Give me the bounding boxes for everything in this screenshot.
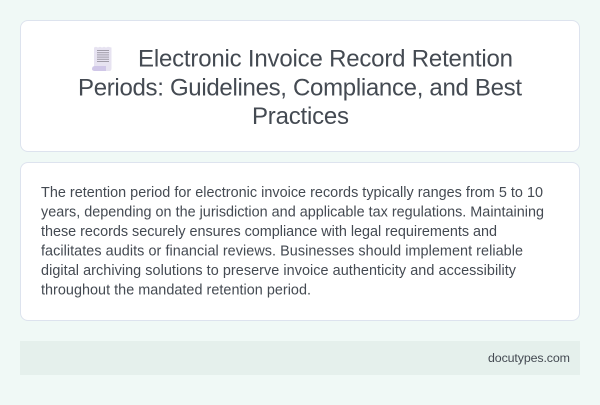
footer source text: docutypes.com xyxy=(488,351,570,365)
body text: facilitates audits or financial reviews. Businesses should implement reliable xyxy=(41,244,523,260)
body text: years, depending on the jurisdiction and applicable tax regulations. Maintaining xyxy=(41,204,544,220)
body text xyxy=(41,185,544,298)
panel: title card xyxy=(20,20,580,152)
title xyxy=(78,46,522,130)
title: Practices xyxy=(252,103,349,130)
title: Electronic Invoice Record Retention xyxy=(138,46,513,73)
title: Periods: Guidelines, Compliance, and Best xyxy=(78,74,522,101)
panel: description card xyxy=(20,162,580,321)
icon: invoice scroll xyxy=(92,46,112,71)
body text: these records securely ensures compliance with legal requirements and xyxy=(41,224,497,240)
body text: digital archiving solutions to preserve invoice authenticity and accessibility xyxy=(41,263,517,279)
footer bar xyxy=(20,341,580,375)
body text: The retention period for electronic invoice records typically ranges from 5 to 10 xyxy=(41,185,543,201)
body text: throughout the mandated retention period. xyxy=(41,282,311,298)
